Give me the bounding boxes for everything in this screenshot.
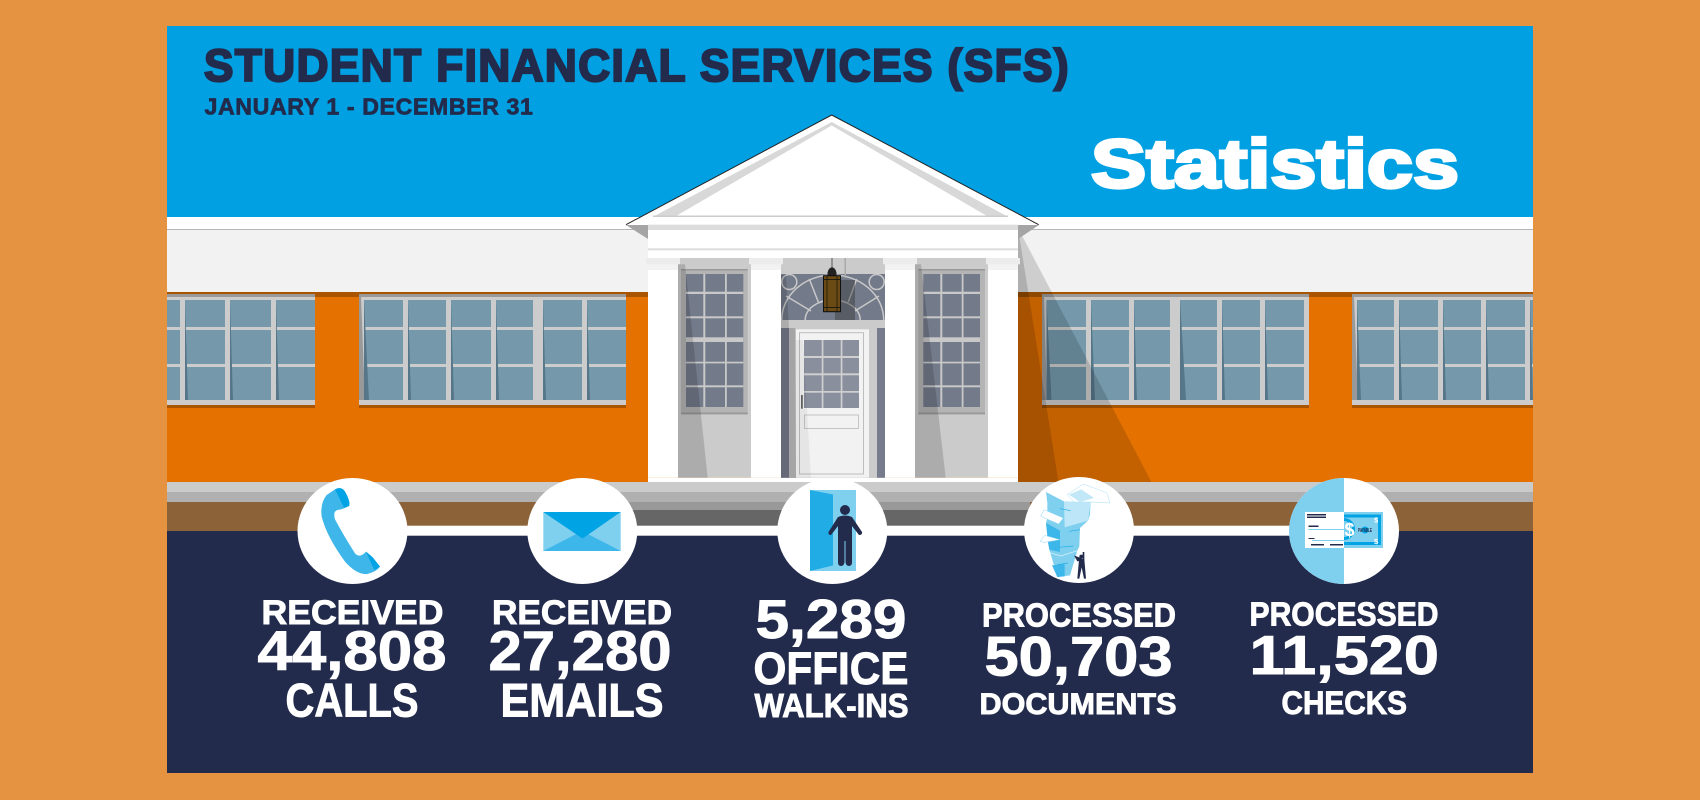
- label: received emails: 27,280: [488, 619, 672, 682]
- window: right of entrance: [1042, 294, 1309, 408]
- icon: check and banknote: $: [1374, 516, 1379, 524]
- stat 4: documents: [980, 477, 1176, 721]
- columns: [646, 258, 1020, 478]
- label: received emails: [488, 594, 672, 726]
- window: portico left: [681, 269, 748, 414]
- sky panel: [167, 26, 1533, 218]
- label: received calls: CALLS: [286, 674, 418, 726]
- icon: check and banknote: $: [1344, 520, 1355, 540]
- label: office walk-ins: OFFICE: [754, 643, 908, 694]
- icon: check and banknote: PAYABLE: [1358, 528, 1372, 534]
- stat 5: checks: [1250, 478, 1439, 721]
- icon: check and banknote: $: [1374, 537, 1379, 546]
- icon: tower of paper: [1024, 477, 1134, 583]
- connecting timeline bar: [400, 526, 1300, 536]
- heading: Statistics: Statistics: [1091, 126, 1459, 202]
- label: processed documents: [980, 598, 1176, 721]
- subtitle: date range: JANUARY 1 - DECEMBER 31: [204, 94, 534, 120]
- door and sidelights: [781, 328, 885, 478]
- title: STUDENT FINANCIAL SERVICES (SFS): [204, 40, 1070, 91]
- label: processed documents: DOCUMENTS: [980, 688, 1176, 721]
- fanlight: [781, 258, 885, 478]
- label: office walk-ins: WALK-INS: [754, 688, 908, 725]
- recessed wall: [678, 258, 988, 478]
- building: wings and walls: [167, 217, 1533, 482]
- label: processed checks: PROCESSED: [1250, 596, 1438, 634]
- label: received calls: RECEIVED: [262, 594, 444, 632]
- label: received emails: EMAILS: [500, 674, 664, 726]
- label: office walk-ins: 5,289: [756, 588, 906, 650]
- label: processed checks: 11,520: [1250, 624, 1439, 686]
- entablature: [648, 225, 1018, 258]
- label: office walk-ins: [754, 588, 908, 725]
- window: far left: [167, 294, 315, 408]
- label: received calls: [258, 594, 446, 726]
- label: received emails: RECEIVED: [492, 594, 672, 632]
- pediment: [626, 115, 1039, 225]
- entrance portico: [626, 115, 1039, 482]
- front steps and ground: [167, 482, 1533, 773]
- portico cast shadow on right wing: [1018, 228, 1152, 482]
- label: processed documents: 50,703: [984, 624, 1172, 688]
- window: far right: [1352, 294, 1533, 408]
- window: portico right: [918, 269, 985, 414]
- label: received calls: 44,808: [258, 619, 446, 682]
- lantern: [824, 258, 855, 320]
- icon: telephone: [298, 478, 408, 584]
- label: processed checks: CHECKS: [1282, 685, 1407, 721]
- label: processed documents: PROCESSED: [982, 598, 1176, 634]
- icon: check and banknote: [1289, 478, 1399, 584]
- icon: person in doorway: [777, 478, 887, 584]
- label: processed checks: [1250, 596, 1439, 721]
- window: left of entrance: [359, 294, 626, 408]
- stat 1: calls: [258, 478, 446, 726]
- stat 3: walk-ins: [754, 478, 908, 725]
- eave shadows: [626, 225, 648, 239]
- recess shadows: [678, 264, 946, 478]
- stat 2: emails: [488, 478, 672, 726]
- icon: envelope: [527, 478, 637, 584]
